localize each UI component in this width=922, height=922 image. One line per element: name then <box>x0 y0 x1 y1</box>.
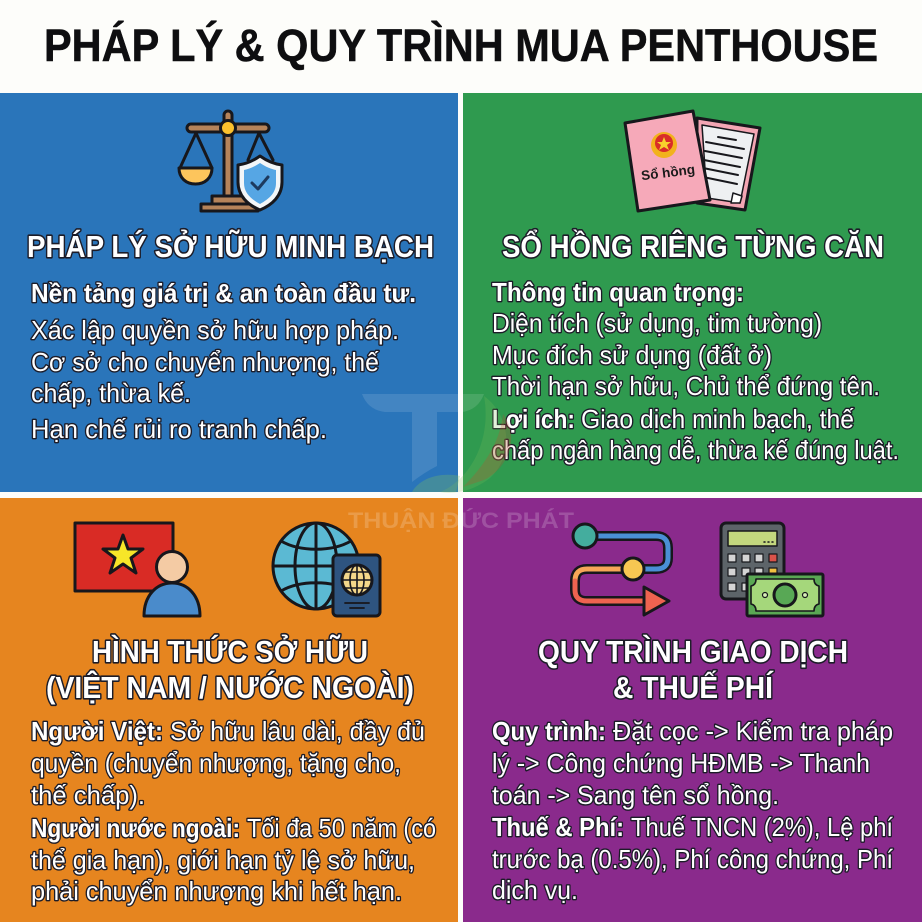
text: transaction process body: lý -> Công chứng HĐMB -> Thanh <box>492 748 870 778</box>
text: transaction process body <box>492 716 894 905</box>
text: ownership form body: Người Việt: <box>31 716 163 746</box>
panel: pink book <box>463 93 922 492</box>
text: ownership form body <box>31 716 436 906</box>
text: ownership form body: Người nước ngoài: <box>31 813 240 843</box>
text: transaction process body: Thuế TNCN (2%), Lệ phí <box>631 812 894 842</box>
text: pink book body: Lợi ích: <box>492 404 575 434</box>
icon: flag and person <box>75 523 200 616</box>
text: pink book body: Mục đích sử dụng (đất ở) <box>492 340 772 370</box>
text: legal ownership body <box>31 278 416 444</box>
text: legal ownership body: Cơ sở cho chuyển nhượng, thế <box>31 347 380 377</box>
icon: scales and shield <box>179 111 282 211</box>
panel: legal ownership <box>0 93 458 492</box>
heading: transaction process: & THUẾ PHÍ <box>613 670 774 705</box>
heading: ownership form: (VIỆT NAM / NƯỚC NGOÀI) <box>46 669 414 705</box>
text: ownership form body: thế chấp). <box>31 780 145 810</box>
heading: ownership form: HÌNH THỨC SỞ HỮU <box>92 633 368 669</box>
text: pink book body: Thời hạn sở hữu, Chủ thể đứng tên. <box>492 371 880 401</box>
text: legal ownership body: Nền tảng giá trị & an toàn đầu tư. <box>31 278 416 308</box>
heading: legal ownership: PHÁP LÝ SỞ HỮU MINH BẠCH <box>27 228 434 264</box>
text: pink book body: Giao dịch minh bạch, thế <box>581 404 855 434</box>
text: ownership form body: phải chuyển nhượng khi hết hạn. <box>31 876 402 906</box>
heading: ownership form <box>46 633 414 705</box>
text: ownership form body: Sở hữu lâu dài, đầy đủ <box>170 716 425 746</box>
text: ownership form body: thể gia hạn), giới hạn tỷ lệ sở hữu, <box>31 845 415 875</box>
icon: pink book and document <box>625 111 760 211</box>
watermark: logo and brand name <box>348 394 575 533</box>
text: transaction process body: Quy trình: <box>492 716 606 746</box>
heading: pink book: SỔ HỒNG RIÊNG TỪNG CĂN <box>502 228 884 264</box>
text: ownership form body: quyền (chuyển nhượng, tặng cho, <box>31 748 401 778</box>
text: pink book body: Thông tin quan trọng: <box>492 277 744 307</box>
text: legal ownership body: Xác lập quyền sở hữu hợp pháp. <box>31 315 399 345</box>
text: transaction process body: dịch vụ. <box>492 875 578 905</box>
heading: transaction process: QUY TRÌNH GIAO DỊCH <box>538 634 848 669</box>
icon: pink book and document: Sổ hồng <box>640 162 696 183</box>
watermark: logo and brand name: THUẬN ĐỨC PHÁT <box>348 508 575 533</box>
text: legal ownership body: chấp, thừa kế. <box>31 378 191 408</box>
icon: calculator and banknote <box>721 523 823 616</box>
text: transaction process body: trước bạ (0.5%), Phí công chứng, Phí <box>492 844 894 874</box>
text: legal ownership body: Hạn chế rủi ro tranh chấp. <box>31 414 327 444</box>
text: transaction process body: Đặt cọc -> Kiểm tra pháp <box>613 716 893 746</box>
text: ownership form body: Tối đa 50 năm (có <box>247 813 436 843</box>
text: transaction process body: Thuế & Phí: <box>492 812 624 842</box>
panel: ownership form <box>0 498 458 922</box>
icon: process path <box>573 524 669 615</box>
text: pink book body <box>492 277 899 465</box>
heading: transaction process <box>538 634 848 705</box>
text: transaction process body: toán -> Sang tên sổ hồng. <box>492 780 779 810</box>
text: pink book body: Diện tích (sử dụng, tim tường) <box>492 308 822 338</box>
icon: emblem <box>651 132 677 158</box>
panel: transaction process <box>463 498 922 922</box>
icon: globe and passport <box>273 523 380 616</box>
title: PHÁP LÝ & QUY TRÌNH MUA PENTHOUSE <box>44 20 878 71</box>
